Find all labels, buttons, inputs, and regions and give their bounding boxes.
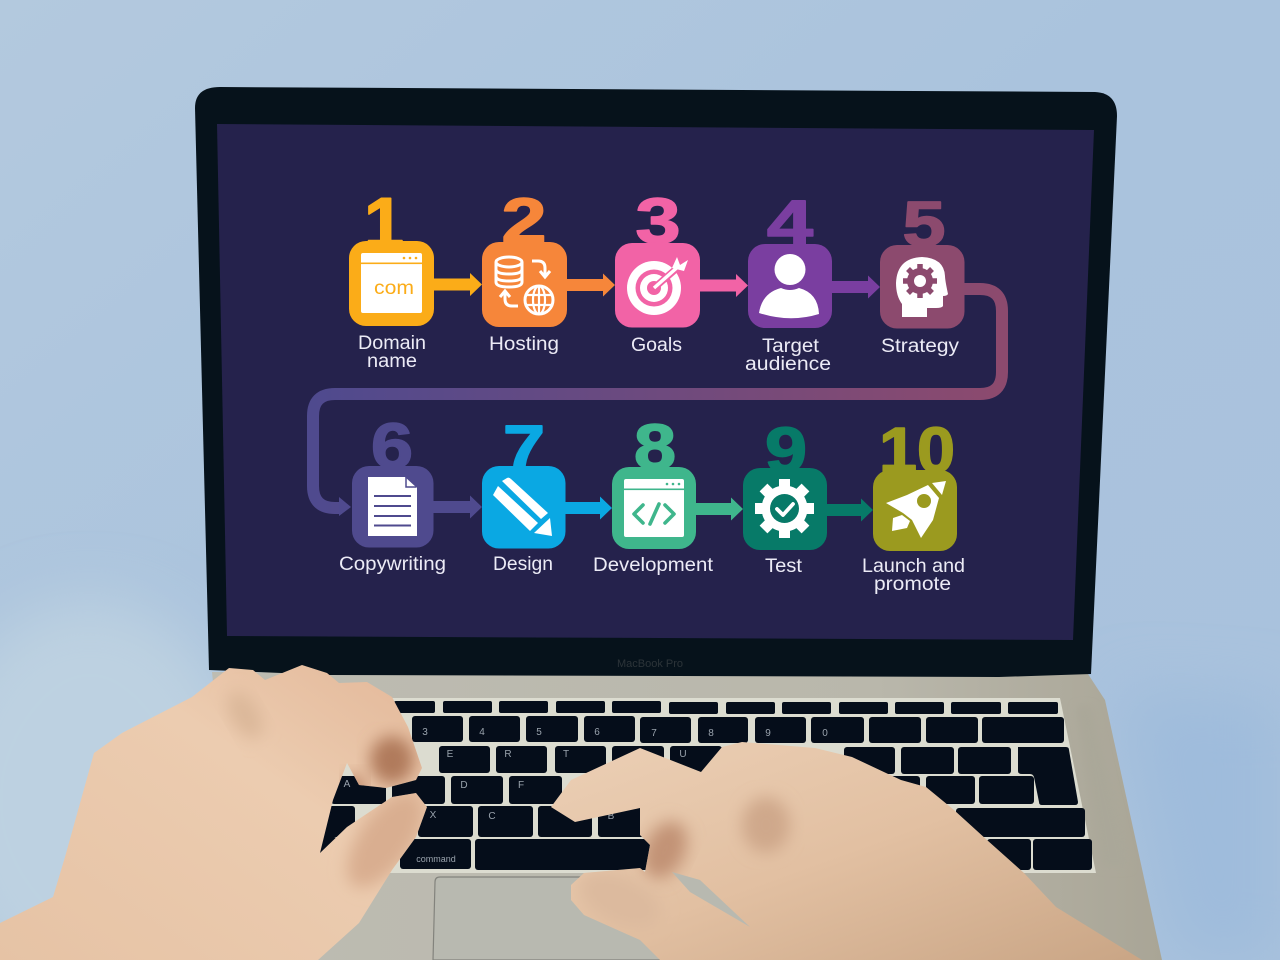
key legends: A bbox=[344, 779, 351, 790]
laptop base bbox=[212, 672, 1162, 960]
step 2: hosting bbox=[482, 185, 615, 355]
key legends: F bbox=[518, 780, 524, 791]
label: Test bbox=[765, 556, 803, 577]
label bbox=[358, 333, 426, 372]
label: Strategy bbox=[881, 336, 960, 357]
label: Target bbox=[762, 336, 820, 357]
tile bbox=[615, 243, 700, 328]
key legends: 8 bbox=[708, 728, 714, 739]
number 4: 4 bbox=[767, 187, 814, 259]
icon: rocket bbox=[886, 481, 946, 538]
label bbox=[745, 336, 831, 375]
tile bbox=[880, 245, 964, 328]
label bbox=[862, 556, 965, 595]
key legends: 0 bbox=[822, 728, 828, 739]
number 10: 10 bbox=[879, 414, 955, 486]
icon: head with gear bbox=[896, 257, 948, 317]
label: Launch and bbox=[862, 556, 965, 577]
icon: code window bbox=[624, 479, 684, 537]
arrow bbox=[698, 274, 748, 297]
key legends: command bbox=[416, 854, 456, 864]
arrow bbox=[565, 274, 615, 296]
label: Domain bbox=[358, 333, 426, 354]
right hand bbox=[540, 740, 1150, 960]
number 1: 1 bbox=[364, 184, 404, 264]
trackpad gap between index finger and thumb bbox=[672, 872, 750, 927]
key legends: X bbox=[430, 810, 437, 821]
key legends bbox=[344, 727, 828, 864]
key legends: 9 bbox=[765, 728, 771, 739]
label: Hosting bbox=[489, 334, 559, 355]
icon: gear with check bbox=[755, 479, 814, 538]
keyboard bbox=[316, 698, 1096, 873]
key legends: E bbox=[447, 749, 454, 760]
connector from step 5 to step 6 bbox=[313, 289, 1002, 516]
tile bbox=[748, 244, 832, 328]
tile bbox=[743, 468, 827, 550]
arrow bbox=[694, 498, 743, 520]
key legends: R bbox=[504, 749, 512, 760]
tile bbox=[612, 467, 696, 549]
tile bbox=[482, 242, 567, 327]
label: Goals bbox=[631, 335, 682, 356]
icon: browser window bbox=[361, 253, 422, 313]
tile bbox=[482, 466, 566, 548]
screen bbox=[217, 124, 1094, 640]
number 8: 8 bbox=[634, 411, 676, 483]
icon: target with arrow bbox=[627, 257, 688, 315]
speaker grille bbox=[1076, 706, 1130, 868]
step 4: target audience bbox=[745, 187, 880, 375]
number 5: 5 bbox=[902, 188, 946, 260]
step 1: domain name bbox=[349, 184, 482, 372]
icon: person bbox=[759, 254, 819, 318]
step 9: test bbox=[743, 414, 873, 577]
key legends: T bbox=[563, 749, 569, 760]
label: Development bbox=[593, 555, 714, 576]
number 2: 2 bbox=[502, 185, 546, 257]
key legends: B bbox=[608, 811, 615, 822]
label: promote bbox=[874, 574, 951, 595]
step 3: goals bbox=[615, 185, 748, 356]
icon: document bbox=[368, 477, 417, 536]
step 8: development bbox=[593, 411, 743, 576]
arrow bbox=[563, 496, 612, 520]
icon: browser window: com bbox=[374, 278, 414, 299]
key legends: C bbox=[488, 811, 496, 822]
icon: pencil bbox=[493, 478, 552, 536]
label: Copywriting bbox=[339, 554, 446, 575]
key legends: 7 bbox=[651, 728, 657, 739]
step 6: copywriting bbox=[339, 410, 482, 575]
step 7: design bbox=[482, 412, 612, 575]
key legends: 6 bbox=[594, 727, 600, 738]
tile bbox=[349, 241, 434, 326]
arrow bbox=[431, 496, 482, 518]
tile bbox=[352, 466, 434, 548]
key legends: 4 bbox=[479, 727, 485, 738]
number 6: 6 bbox=[371, 410, 413, 482]
label: name bbox=[367, 351, 417, 372]
label: audience bbox=[745, 354, 831, 375]
number 3: 3 bbox=[636, 185, 680, 257]
key legends: U bbox=[679, 749, 687, 760]
left hand bbox=[0, 650, 440, 960]
trackpad bbox=[433, 877, 775, 960]
number 9: 9 bbox=[765, 414, 807, 486]
step 5: strategy bbox=[880, 188, 964, 357]
step 10: launch and promote bbox=[862, 414, 965, 595]
label: Design bbox=[493, 554, 553, 575]
key legends: 5 bbox=[536, 727, 542, 738]
arrow bbox=[830, 276, 880, 298]
number 7: 7 bbox=[503, 412, 545, 484]
key legends: D bbox=[460, 780, 468, 791]
key legends: 3 bbox=[422, 727, 428, 738]
arrow bbox=[432, 273, 482, 296]
MacBook label: MacBook Pro bbox=[617, 658, 683, 670]
icon: database and globe bbox=[496, 257, 553, 314]
arrow bbox=[825, 498, 873, 522]
tile bbox=[873, 470, 957, 551]
